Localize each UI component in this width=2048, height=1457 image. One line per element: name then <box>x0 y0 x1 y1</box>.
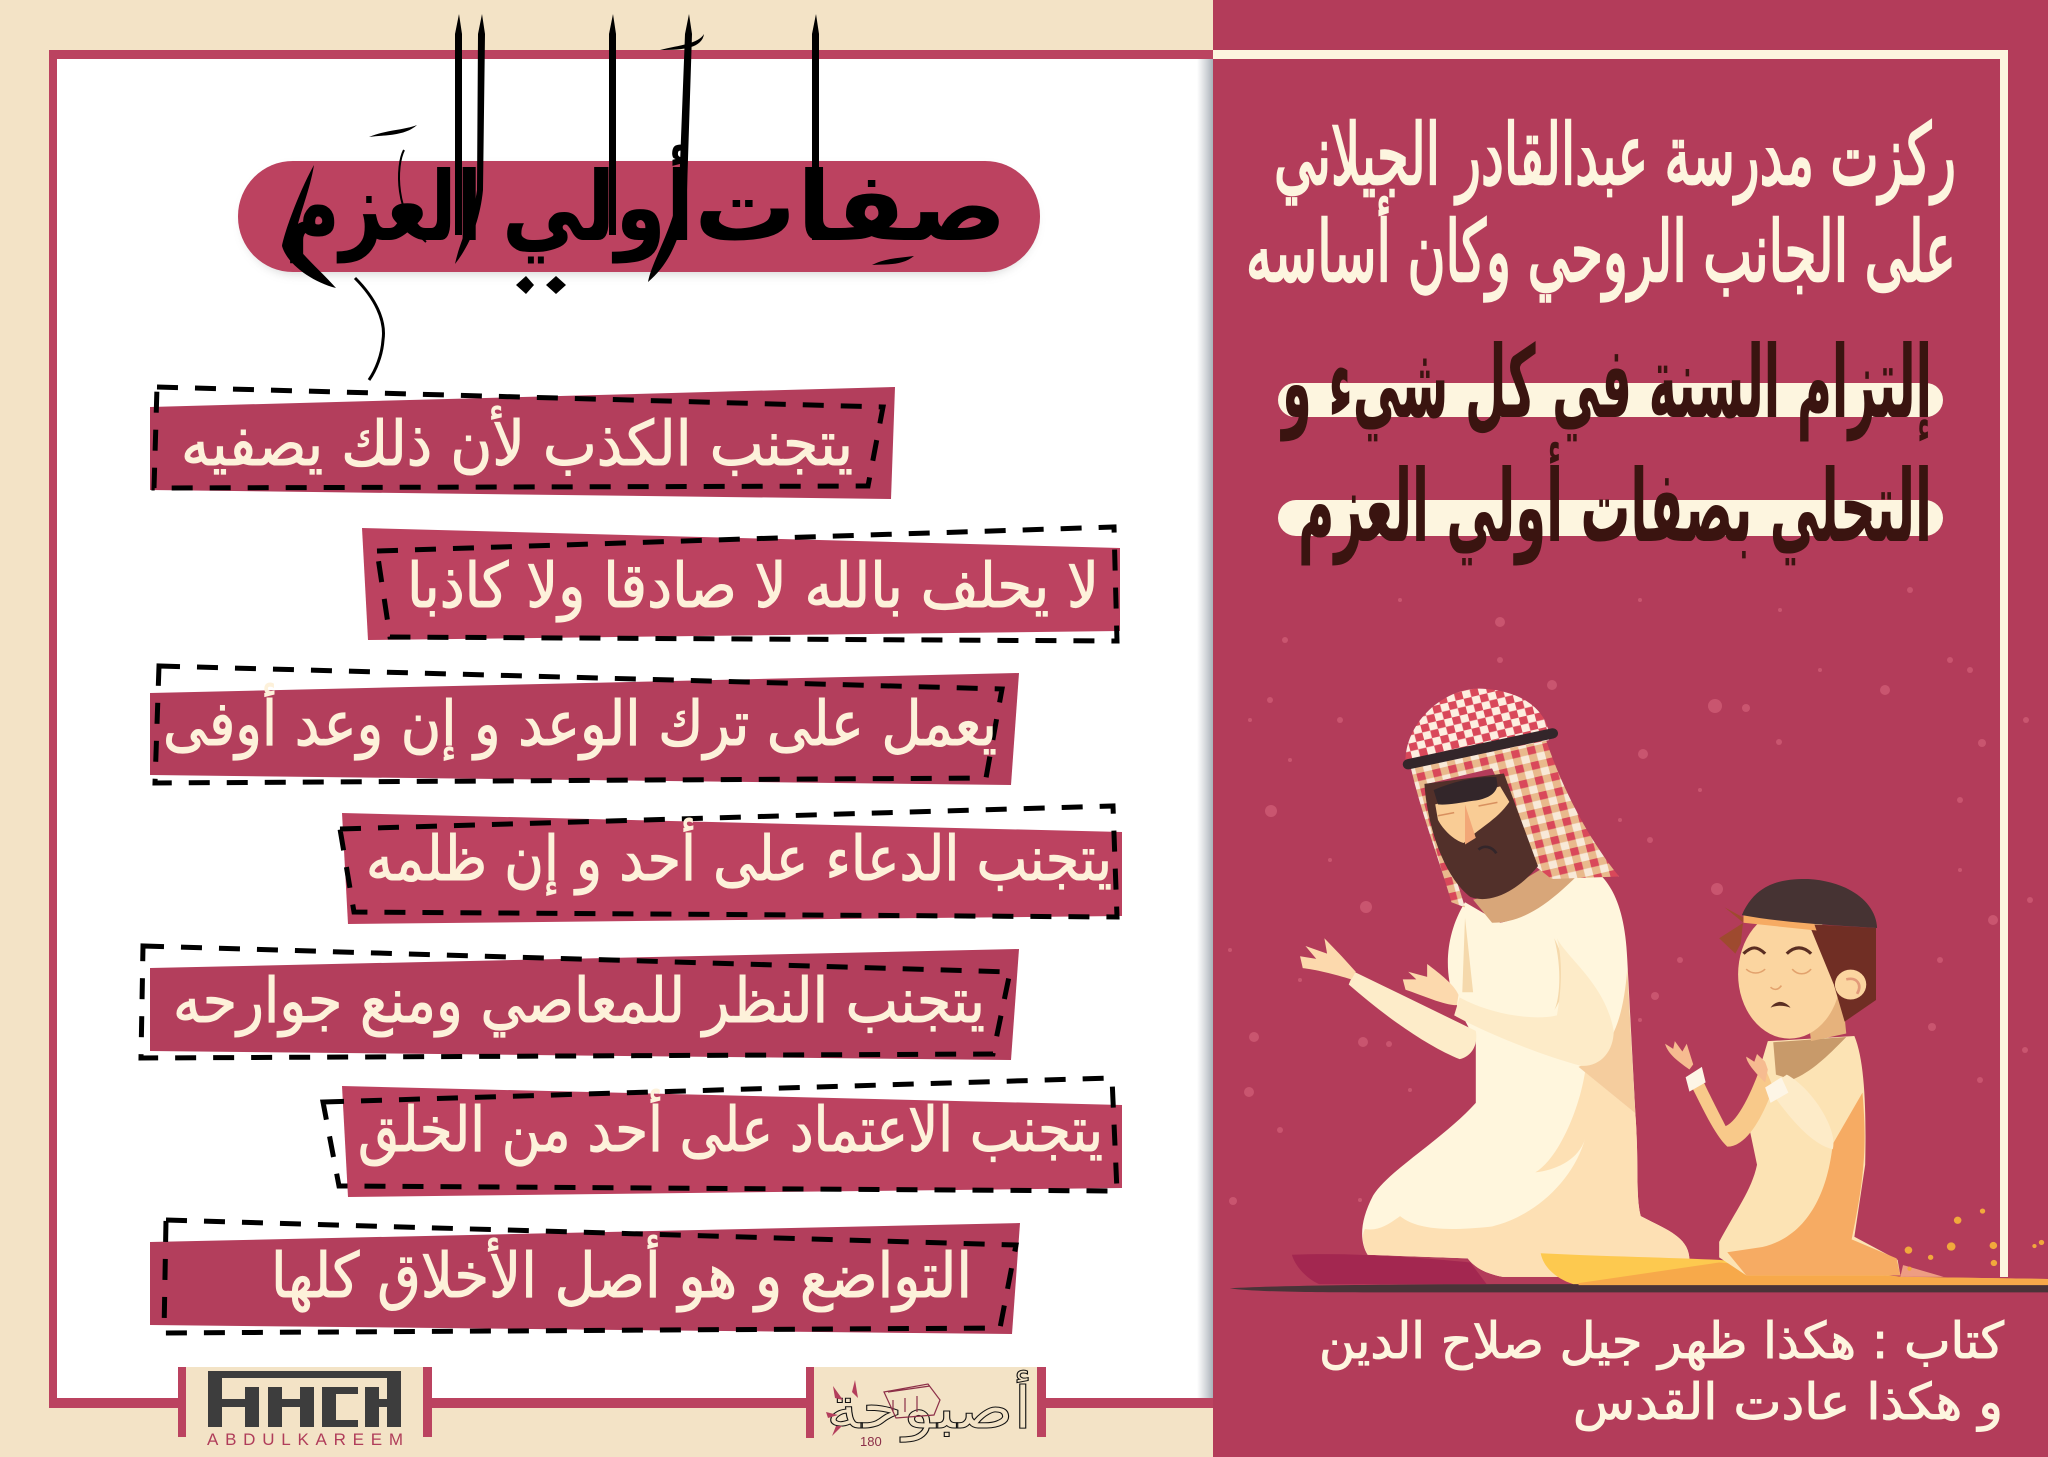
title <box>282 14 1007 380</box>
panel: left white framed panel <box>49 50 1213 1408</box>
list item 5: يتجنب النظر للمعاصي ومنع جوارحه <box>173 964 985 1037</box>
source text: و هكذا عادت القدس <box>1573 1373 2003 1432</box>
boy <box>1665 879 1944 1277</box>
logo: Abdulkareem <box>178 1367 432 1457</box>
logo: Osbouha 180: أصبوحة <box>826 1370 1032 1443</box>
list item 4: يتجنب الدعاء على أحد و إن ظلمه <box>366 818 1112 896</box>
title: صفات <box>694 151 1007 263</box>
logo: Abdulkareem: ABDULKAREEM <box>207 1430 403 1449</box>
title: أولي <box>502 145 694 264</box>
list item 1: يتجنب الكذب لأن ذلك يصفيه <box>181 405 853 480</box>
right panel cream frame <box>1213 50 2008 1277</box>
list item 3: يعمل على ترك الوعد و إن وعد أوفى <box>163 683 997 761</box>
background particles <box>1228 587 2033 1205</box>
gold sparkles <box>1905 1208 2044 1271</box>
panel: right crimson panel <box>1213 0 2048 1457</box>
list item 2: لا يحلف بالله لا صادقا ولا كاذبا <box>407 549 1099 622</box>
title banner <box>238 161 1040 274</box>
title: العزم <box>285 151 482 264</box>
intro text <box>1246 106 1956 302</box>
logo: Osbouha 180 <box>806 1367 1046 1457</box>
red prayer mat and floor <box>1230 1254 2048 1292</box>
yellow prayer mat <box>1541 1253 2048 1285</box>
list item 7: التواضع و هو أصل الأخلاق كلها <box>271 1235 972 1313</box>
list item 2 <box>362 527 1120 641</box>
list item 7 <box>150 1220 1020 1334</box>
source text <box>1319 1312 2004 1432</box>
list item 6: يتجنب الاعتماد على أحد من الخلق <box>358 1089 1103 1166</box>
list item 6 <box>323 1078 1122 1197</box>
man <box>1300 689 1689 1277</box>
list item 3 <box>150 666 1019 785</box>
illustration: praying father and son <box>1230 689 2048 1292</box>
list item 4 <box>340 806 1122 924</box>
list item 1 <box>150 387 895 499</box>
list item 5 <box>141 946 1019 1060</box>
logo: Osbouha 180: 180 <box>860 1434 882 1449</box>
source text: كتاب : هكذا ظهر جيل صلاح الدين <box>1319 1312 2004 1371</box>
